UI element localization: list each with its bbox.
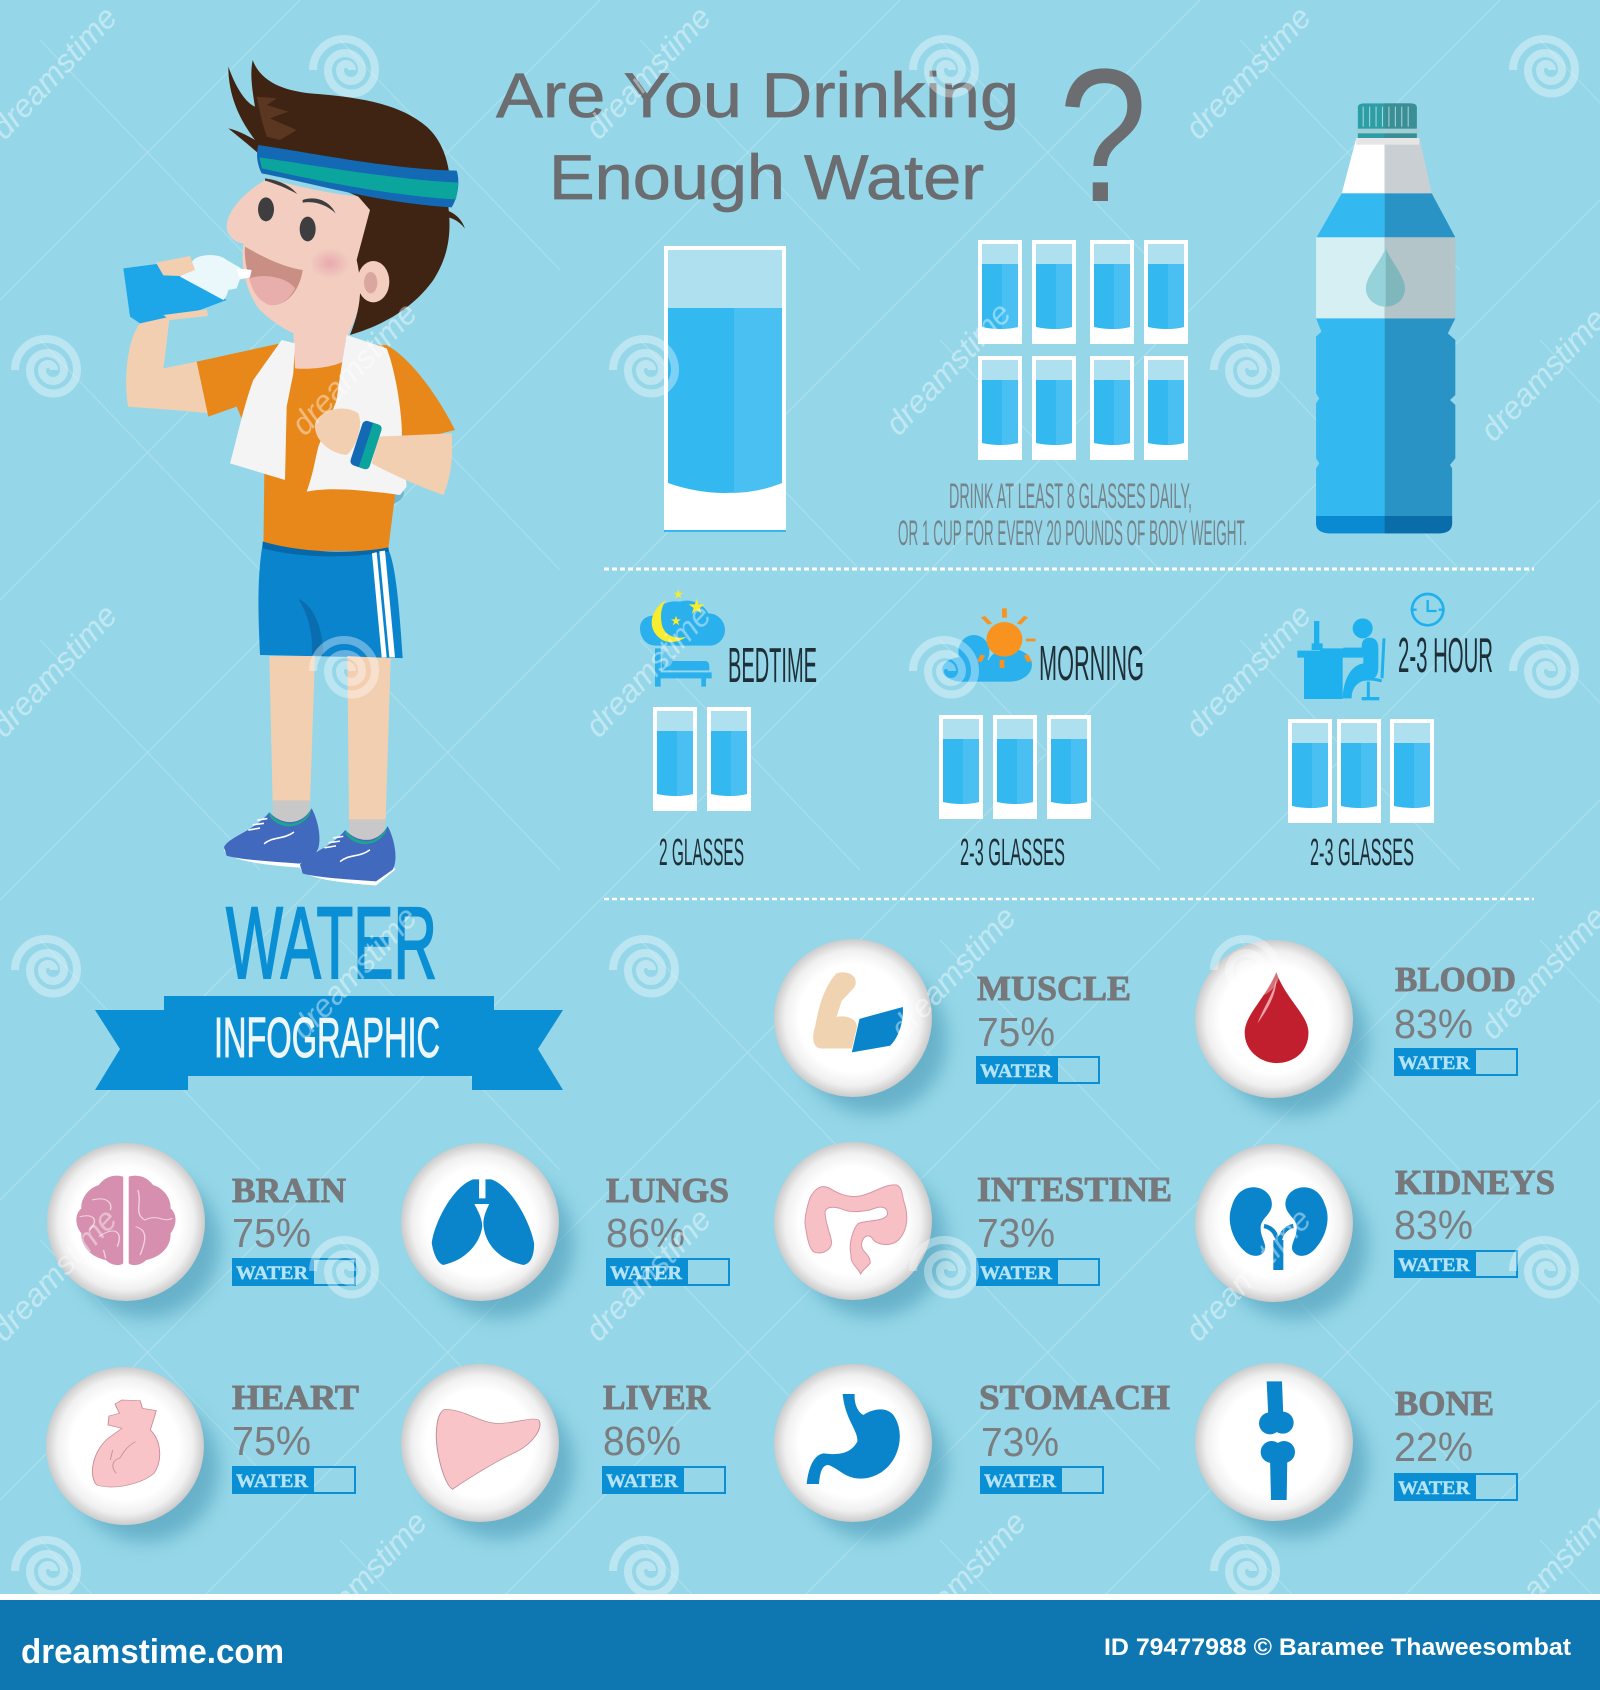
- ribbon banner: INFOGRAPHIC: [95, 996, 563, 1090]
- panel: heart: [46, 1367, 359, 1542]
- name: STOMACH: [979, 1378, 1170, 1417]
- schedule: 2-3 hour: 2-3 GLASSES: [1310, 832, 1414, 874]
- watermark text: dreamstime: [578, 597, 718, 744]
- panel: liver: [401, 1364, 725, 1539]
- percentage: 75%: [232, 1418, 311, 1464]
- panel: muscle: [774, 939, 1131, 1114]
- water bar: [976, 1258, 1099, 1286]
- water bar: WATER: [984, 1471, 1056, 1492]
- water bar: WATER: [1398, 1478, 1470, 1499]
- schedule: morning: [939, 608, 1144, 874]
- water bar: WATER: [236, 1471, 308, 1492]
- name: BONE: [1395, 1384, 1494, 1423]
- footer logo text: dreamstime.com: [21, 1633, 284, 1671]
- eight glasses grid: [978, 240, 1188, 460]
- watermark text: dreamstime: [578, 0, 718, 146]
- orange shirt: [197, 343, 455, 551]
- right shoe: [300, 826, 395, 885]
- water bar: WATER: [980, 1263, 1052, 1284]
- icon: lungs: [432, 1179, 534, 1265]
- mouth: [245, 247, 303, 305]
- icon: muscle: [813, 972, 903, 1052]
- neck and head: [227, 178, 370, 369]
- water bar: [602, 1466, 725, 1494]
- icon: blood drop: [1245, 972, 1308, 1063]
- name: LUNGS: [606, 1171, 729, 1210]
- watermark text: dreamstime: [284, 295, 424, 442]
- legs: [269, 656, 391, 820]
- schedule: 2-3 hour: [1288, 594, 1493, 874]
- socks: [273, 800, 386, 840]
- icon: cloud, moon and bed: [640, 589, 725, 687]
- watermark text: dreamstime: [294, 1504, 434, 1651]
- water bar: [1394, 1250, 1517, 1278]
- wristband: [349, 420, 383, 470]
- section divider: [604, 898, 1534, 900]
- left shoe: [224, 848, 318, 868]
- percentage: 73%: [977, 1210, 1055, 1256]
- question mark: ?: [1059, 30, 1147, 242]
- character upper body: [123, 60, 465, 551]
- title: Are You Drinking: [496, 61, 1019, 131]
- large glass of water: [664, 246, 786, 532]
- percentage: 75%: [232, 1210, 311, 1256]
- section divider: [604, 568, 1534, 570]
- schedule: morning: 2-3 GLASSES: [960, 832, 1065, 874]
- character: boy drinking water: [123, 60, 465, 885]
- water bar: [976, 1056, 1099, 1084]
- panel: kidneys: [1195, 1144, 1555, 1319]
- holding arm and fist: [372, 433, 452, 495]
- panel: bone: [1195, 1363, 1517, 1538]
- towel: [230, 340, 295, 480]
- hand holding bottle: [156, 256, 195, 276]
- water bar: [1394, 1048, 1517, 1076]
- eyes and brows: [258, 197, 274, 221]
- advice text: DRINK AT LEAST 8 GLASSES DAILY,: [949, 477, 1192, 516]
- percentage: 73%: [981, 1419, 1059, 1465]
- hair: [228, 60, 450, 335]
- icon: stomach: [807, 1394, 900, 1484]
- headband: [257, 145, 458, 207]
- schedule: bedtime: [640, 589, 817, 874]
- panel: brain: [47, 1143, 355, 1318]
- water bottle illustration: [1316, 103, 1455, 533]
- water bar: [232, 1466, 355, 1494]
- shorts: [258, 543, 403, 658]
- water bar: WATER: [980, 1061, 1052, 1082]
- water bar: WATER: [1398, 1053, 1470, 1074]
- panel: blood: [1195, 940, 1517, 1115]
- three glasses: [1288, 719, 1434, 823]
- percentage: 22%: [1394, 1424, 1473, 1470]
- water bottle: [123, 264, 227, 323]
- watermark text: dreamstime: [1178, 1201, 1318, 1348]
- name: BRAIN: [232, 1171, 346, 1210]
- two glasses: [653, 707, 751, 811]
- water bar: [606, 1258, 729, 1286]
- icon: sun and cloud: [942, 608, 1036, 682]
- character lower body: [224, 542, 403, 885]
- panel: stomach: [774, 1364, 1170, 1539]
- footer bar: [0, 1594, 1600, 1690]
- water bar: [1394, 1473, 1517, 1501]
- icon: brain: [76, 1176, 176, 1265]
- percentage: 83%: [1394, 1202, 1473, 1248]
- three glasses: [939, 715, 1091, 819]
- watermark text: dreamstime: [893, 1504, 1033, 1651]
- icon: liver: [436, 1409, 540, 1489]
- water bar: [232, 1258, 355, 1286]
- title: [496, 61, 1019, 213]
- water bar: WATER: [606, 1471, 678, 1492]
- percentage: 75%: [977, 1009, 1055, 1055]
- percentage: 83%: [1394, 1001, 1473, 1047]
- text: MORNING: [1039, 637, 1144, 691]
- title: Enough Water: [549, 143, 984, 213]
- name: LIVER: [603, 1378, 711, 1417]
- watermark text: dreamstime: [883, 899, 1023, 1046]
- heading: WATER: WATER: [226, 886, 437, 1000]
- water bar: WATER: [1398, 1255, 1470, 1276]
- watermark text: dreamstime: [578, 1201, 718, 1348]
- icon: heart: [92, 1400, 160, 1487]
- icon: person at desk with clock: [1297, 594, 1445, 700]
- water bar: [980, 1466, 1103, 1494]
- water bar: WATER: [610, 1263, 682, 1284]
- watermark text: dreamstime: [1178, 0, 1318, 146]
- name: BLOOD: [1395, 960, 1516, 999]
- water bar: WATER: [236, 1263, 308, 1284]
- name: KIDNEYS: [1395, 1163, 1555, 1202]
- watermark text: dreamstime: [284, 899, 424, 1046]
- raised arm: [126, 315, 208, 413]
- icon: kidneys: [1230, 1187, 1328, 1270]
- footer credit: ID 79477988 © Baramee Thaweesombat: [1104, 1634, 1571, 1661]
- name: HEART: [232, 1378, 359, 1417]
- watermark text: dreamstime: [878, 295, 1018, 442]
- name: MUSCLE: [977, 969, 1131, 1008]
- schedule: bedtime: 2 GLASSES: [659, 832, 744, 874]
- percentage: 86%: [606, 1210, 685, 1256]
- ribbon banner: INFOGRAPHIC: INFOGRAPHIC: [214, 1006, 440, 1070]
- icon: bone joint: [1259, 1381, 1295, 1500]
- panel: lungs: [401, 1143, 729, 1318]
- name: INTESTINE: [977, 1170, 1172, 1209]
- panel: intestine: [774, 1142, 1172, 1317]
- watermark text: dreamstime: [1178, 597, 1318, 744]
- percentage: 86%: [603, 1418, 681, 1464]
- advice text: [898, 477, 1247, 553]
- ear: [357, 261, 389, 302]
- icon: intestine: [805, 1185, 907, 1274]
- text: BEDTIME: [728, 639, 817, 693]
